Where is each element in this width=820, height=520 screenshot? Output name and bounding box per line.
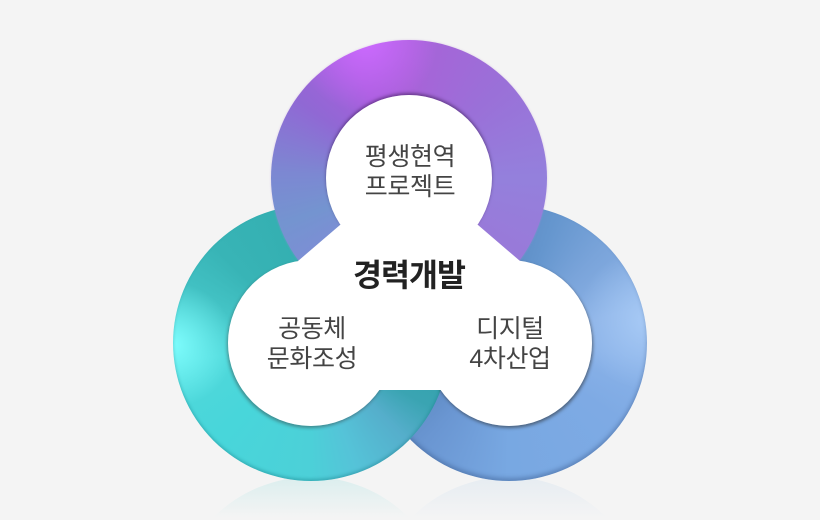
ring: blue, digital bbox=[371, 205, 647, 481]
white circle: right bbox=[426, 260, 592, 426]
white circle: left bbox=[228, 260, 394, 426]
label: lifelong project: 프로젝트 bbox=[365, 173, 455, 201]
ring: teal, community bbox=[173, 205, 449, 481]
white circle: top bbox=[326, 95, 492, 261]
inner shadow: top circle bbox=[326, 95, 492, 261]
label: lifelong project: 평생현역 bbox=[365, 143, 455, 171]
reflection: right ring bbox=[445, 479, 574, 494]
label: community culture bbox=[267, 315, 357, 373]
ring: purple, lifelong bbox=[271, 40, 547, 316]
heading: career development: 경력개발 bbox=[353, 257, 465, 293]
label: digital 4th industry bbox=[469, 315, 551, 373]
label: digital 4th industry: 디지털 bbox=[476, 315, 544, 343]
inner shadow: left circle bbox=[228, 260, 394, 426]
inner shadow: right circle bbox=[426, 260, 592, 426]
label: community culture: 공동체 bbox=[278, 315, 346, 343]
label: digital 4th industry: 4차산업 bbox=[469, 345, 551, 373]
reflection: left ring bbox=[229, 479, 392, 504]
white polygon: centre bbox=[298, 225, 520, 390]
white centre shape bbox=[228, 95, 592, 426]
label: lifelong project bbox=[365, 143, 455, 201]
label: community culture: 문화조성 bbox=[267, 345, 357, 373]
